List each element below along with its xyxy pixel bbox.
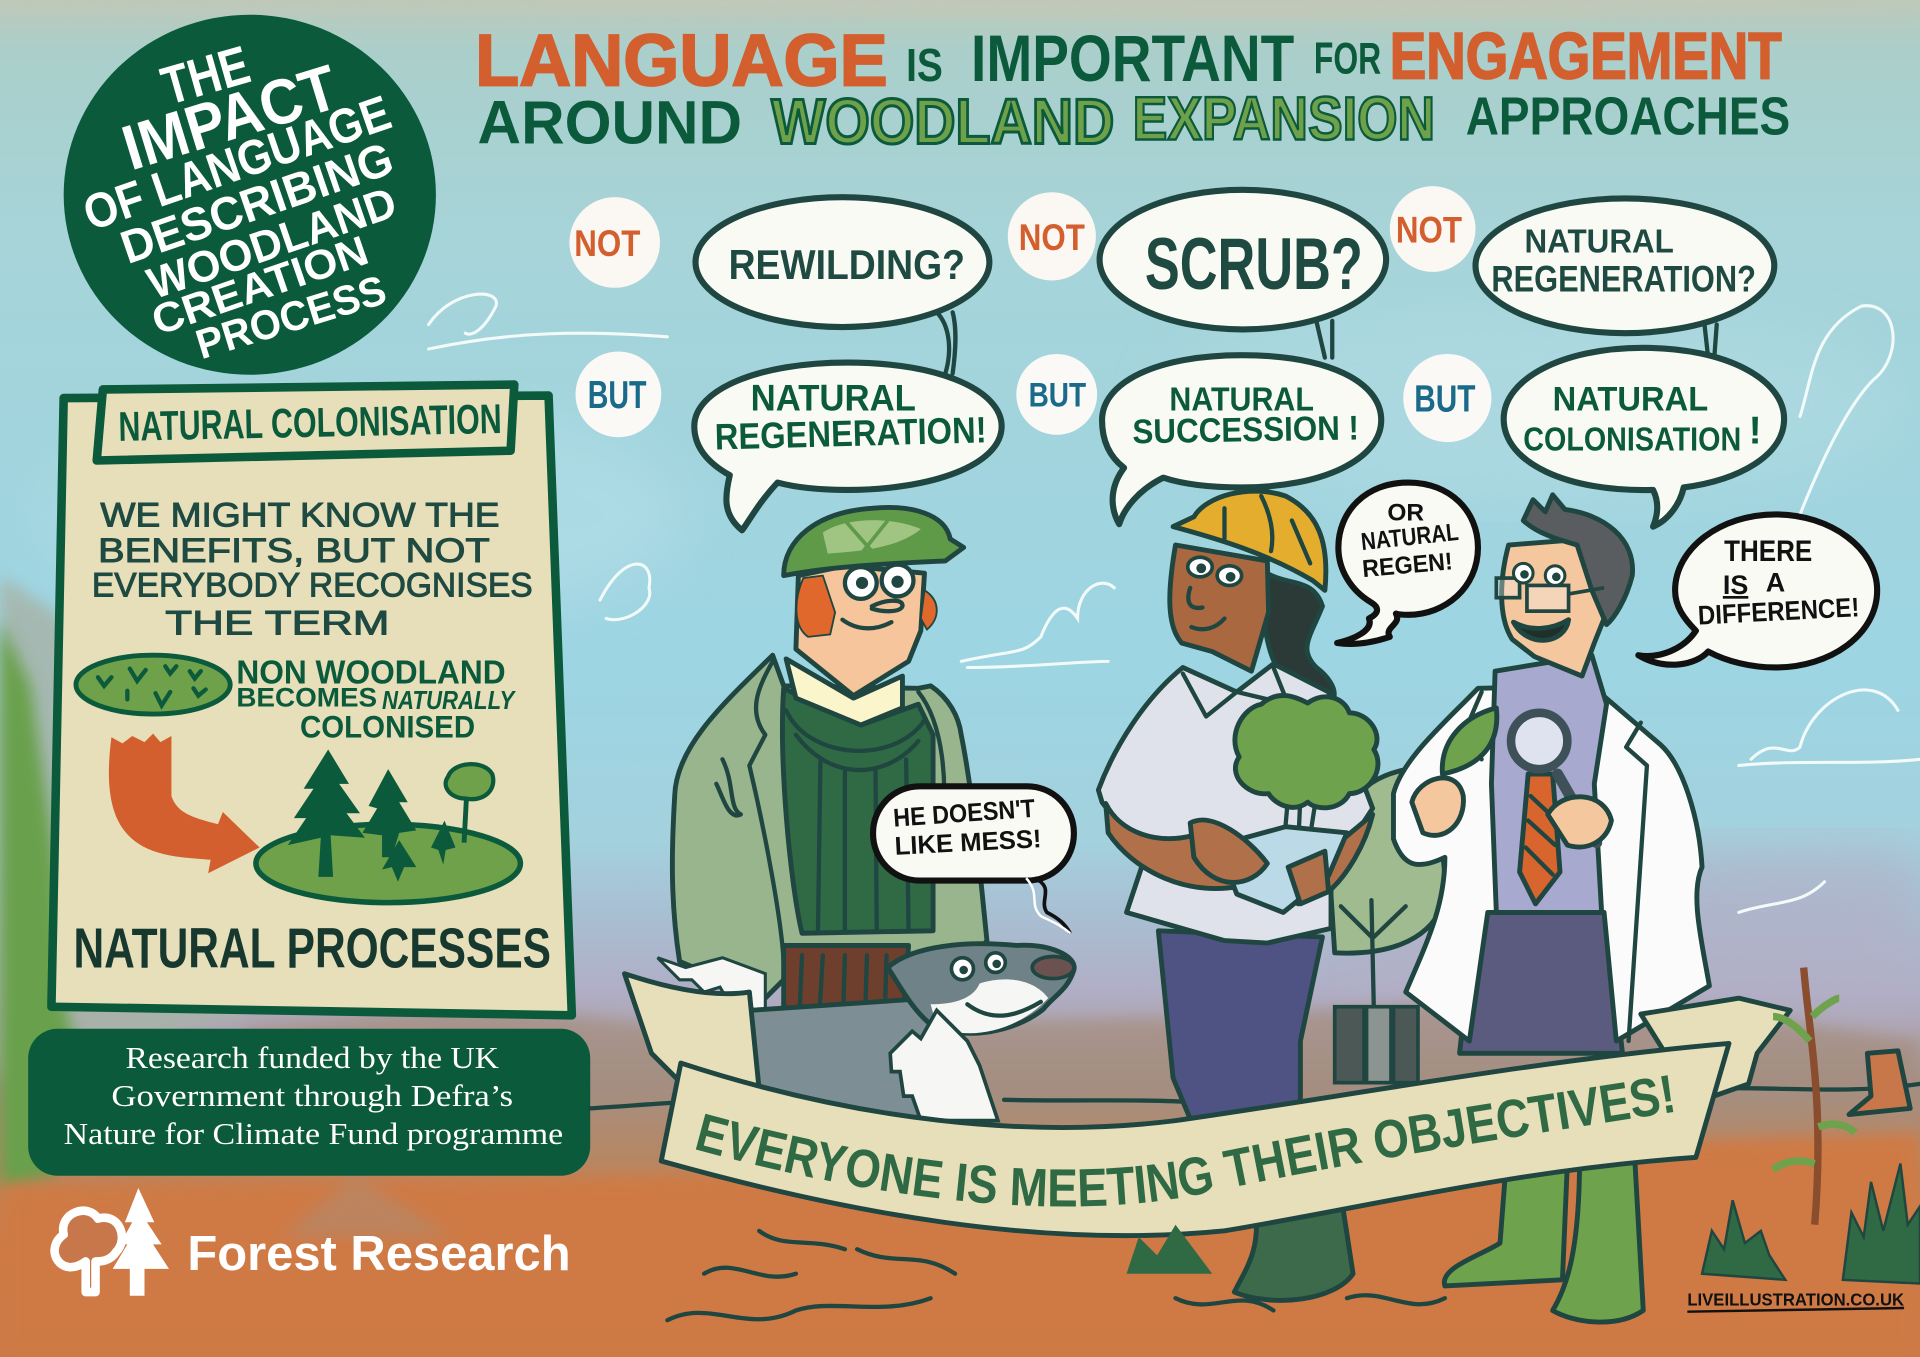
hair — [1523, 495, 1633, 625]
non woodland caption: COLONISED — [300, 708, 475, 744]
panel heading: NATURAL COLONISATION — [118, 395, 502, 450]
badge: the impact of language — [64, 15, 436, 375]
funding note — [28, 1029, 590, 1176]
braid and hair — [1261, 569, 1334, 703]
banner: everyone is meeting their objectives — [622, 971, 1793, 1238]
speech bubble: natural succession — [1102, 355, 1381, 524]
title: IMPORTANT — [971, 22, 1294, 96]
lab coat — [1393, 686, 1709, 1041]
logo: forest research: Forest Research — [187, 1227, 571, 1281]
panel body text: WE MIGHT KNOW THE — [100, 497, 500, 535]
speech bubble: natural colonisation: ! — [1749, 409, 1762, 452]
label: not, third column: NOT — [1396, 209, 1463, 250]
panel body text: THE TERM — [165, 604, 389, 642]
badge: the impact of language: THE — [155, 35, 256, 117]
hair — [796, 576, 937, 637]
icon: grassland oval — [76, 655, 230, 714]
shirt collar — [786, 659, 902, 725]
speech bubble: natural colonisation: COLONISATION — [1523, 422, 1741, 459]
funding note: Nature for Climate Fund programme — [64, 1117, 563, 1151]
character: scientist — [1393, 495, 1709, 1322]
speech bubble: or natural regen: OR — [1387, 500, 1424, 527]
shirt — [1491, 655, 1607, 912]
panel heading — [97, 385, 514, 460]
jacket — [672, 655, 987, 998]
horizon line — [590, 1084, 1920, 1108]
speech bubble: he doesn't like mess: LIKE MESS! — [894, 825, 1042, 861]
label: not, third column — [1390, 186, 1476, 272]
speech bubble: natural regeneration: REGENERATION! — [714, 409, 987, 457]
title: EXPANSION — [1133, 85, 1435, 153]
non woodland caption: BECOMES — [236, 683, 377, 713]
sapling and tree stump — [1773, 968, 1910, 1225]
speech bubble: natural succession: SUCCESSION ! — [1132, 409, 1359, 451]
arrow: orange process arrow — [109, 734, 260, 873]
bush and saplings behind — [1329, 769, 1445, 1083]
speech bubble: natural regeneration: NATURAL — [751, 377, 916, 418]
label: but, third column — [1403, 354, 1491, 442]
badge: the impact of language: PROCESS — [190, 266, 391, 368]
right hand — [1548, 797, 1611, 847]
badge: the impact of language: OF LANGUAGE — [77, 86, 398, 241]
non woodland caption — [236, 654, 517, 744]
speech bubble: natural regeneration question — [1476, 198, 1774, 358]
speech bubble: natural succession: NATURAL — [1169, 381, 1314, 418]
label: but, second column — [1016, 354, 1097, 435]
non woodland caption: NATURALLY — [382, 687, 517, 715]
character: dog — [749, 944, 1074, 1121]
title: APPROACHES — [1466, 87, 1790, 147]
speech bubble: natural colonisation — [1504, 348, 1784, 527]
potted tree — [1190, 695, 1378, 912]
speech bubble: natural colonisation: NATURAL — [1553, 380, 1708, 418]
panel body text: EVERYBODY RECOGNISES — [92, 566, 533, 604]
speech bubble: there is a difference: IS — [1723, 570, 1748, 600]
label: but, third column: BUT — [1414, 379, 1476, 421]
forearms — [1106, 803, 1249, 889]
label: but, second column: BUT — [1029, 377, 1086, 415]
sweater — [782, 688, 933, 933]
title — [475, 19, 1790, 157]
speech bubble: there is a difference — [1638, 514, 1877, 667]
magnifying glass — [1511, 713, 1597, 843]
speech bubble: natural regeneration — [694, 363, 1002, 530]
ground details — [667, 1163, 1920, 1320]
funding note: Government through Defra’s — [111, 1079, 513, 1113]
leaf and hand — [1412, 708, 1497, 835]
badge: the impact of language: WOODLAND — [141, 178, 403, 309]
natural processes label: NATURAL PROCESSES — [73, 917, 551, 980]
label: not, second column — [1008, 192, 1096, 280]
speech bubble: natural regeneration question: REGENERATION? — [1491, 258, 1756, 299]
face — [1170, 545, 1269, 671]
icon: woodland oval with trees — [256, 750, 520, 903]
speech bubble: there is a difference: DIFFERENCE! — [1697, 592, 1860, 631]
speech bubble: or natural regen: REGEN! — [1361, 548, 1454, 583]
speech bubble: rewilding: REWILDING? — [729, 241, 965, 288]
title: AROUND — [478, 88, 742, 156]
shirt — [1098, 664, 1373, 943]
badge: the impact of language: IMPACT — [114, 52, 346, 184]
title: FOR — [1314, 34, 1381, 83]
boots — [1234, 1194, 1353, 1300]
badge: the impact of language: CREATION — [146, 226, 374, 344]
head — [1502, 539, 1614, 676]
glasses — [1496, 578, 1604, 611]
speech bubble: he doesn't like mess — [873, 786, 1074, 933]
label: not, first column: NOT — [574, 223, 641, 264]
logo: forest research — [55, 1188, 571, 1296]
panel body text — [92, 497, 533, 642]
speech bubble: natural regeneration question: NATURAL — [1524, 223, 1674, 260]
speech bubble: he doesn't like mess: HE DOESN'T — [892, 795, 1036, 833]
trousers — [1158, 931, 1322, 1225]
title: WOODLAND — [771, 86, 1114, 157]
character: farmer — [658, 508, 987, 1041]
speech bubble: rewilding — [696, 197, 989, 374]
speech bubble: scrub: SCRUB? — [1145, 222, 1363, 305]
flat cap — [784, 508, 964, 576]
speech bubble: or natural regen: NATURAL — [1360, 519, 1460, 556]
striped trousers — [784, 945, 909, 1041]
speech bubble: there is a difference: THERE — [1724, 535, 1812, 568]
character: forester — [1098, 491, 1378, 1300]
funding note: Research funded by the UK — [126, 1041, 499, 1075]
banner: everyone is meeting their objectives: EVERYONE IS MEETING THEIR OBJECTIVES! — [696, 1075, 1674, 1206]
speech bubble: scrub — [1100, 190, 1386, 358]
white cuff fur — [658, 958, 765, 1026]
non woodland caption: NON WOODLAND — [236, 654, 506, 691]
panel body text: BENEFITS, BUT NOT — [98, 532, 490, 570]
panel: natural colonisation — [51, 385, 572, 1015]
badge: the impact of language: DESCRIBING — [114, 132, 400, 274]
trousers — [1460, 909, 1622, 1053]
wellington boots — [1444, 1163, 1567, 1286]
speech bubble: or natural regen — [1337, 483, 1478, 644]
label: not, second column: NOT — [1019, 217, 1085, 258]
face — [796, 566, 924, 696]
title: LANGUAGE — [475, 19, 888, 102]
tie — [1520, 774, 1560, 904]
eyes and mouth — [845, 567, 877, 599]
title: ENGAGEMENT — [1390, 19, 1782, 93]
label: but, first column — [576, 351, 661, 437]
title: IS — [906, 39, 943, 91]
credit: live illustration: LIVEILLUSTRATION.CO.UK — [1687, 1290, 1904, 1310]
hard hat — [1173, 491, 1326, 590]
label: not, first column — [569, 197, 660, 288]
speech bubble: there is a difference: A — [1766, 568, 1785, 598]
label: but, first column: BUT — [588, 374, 647, 417]
decorative white clouds — [429, 294, 1920, 912]
